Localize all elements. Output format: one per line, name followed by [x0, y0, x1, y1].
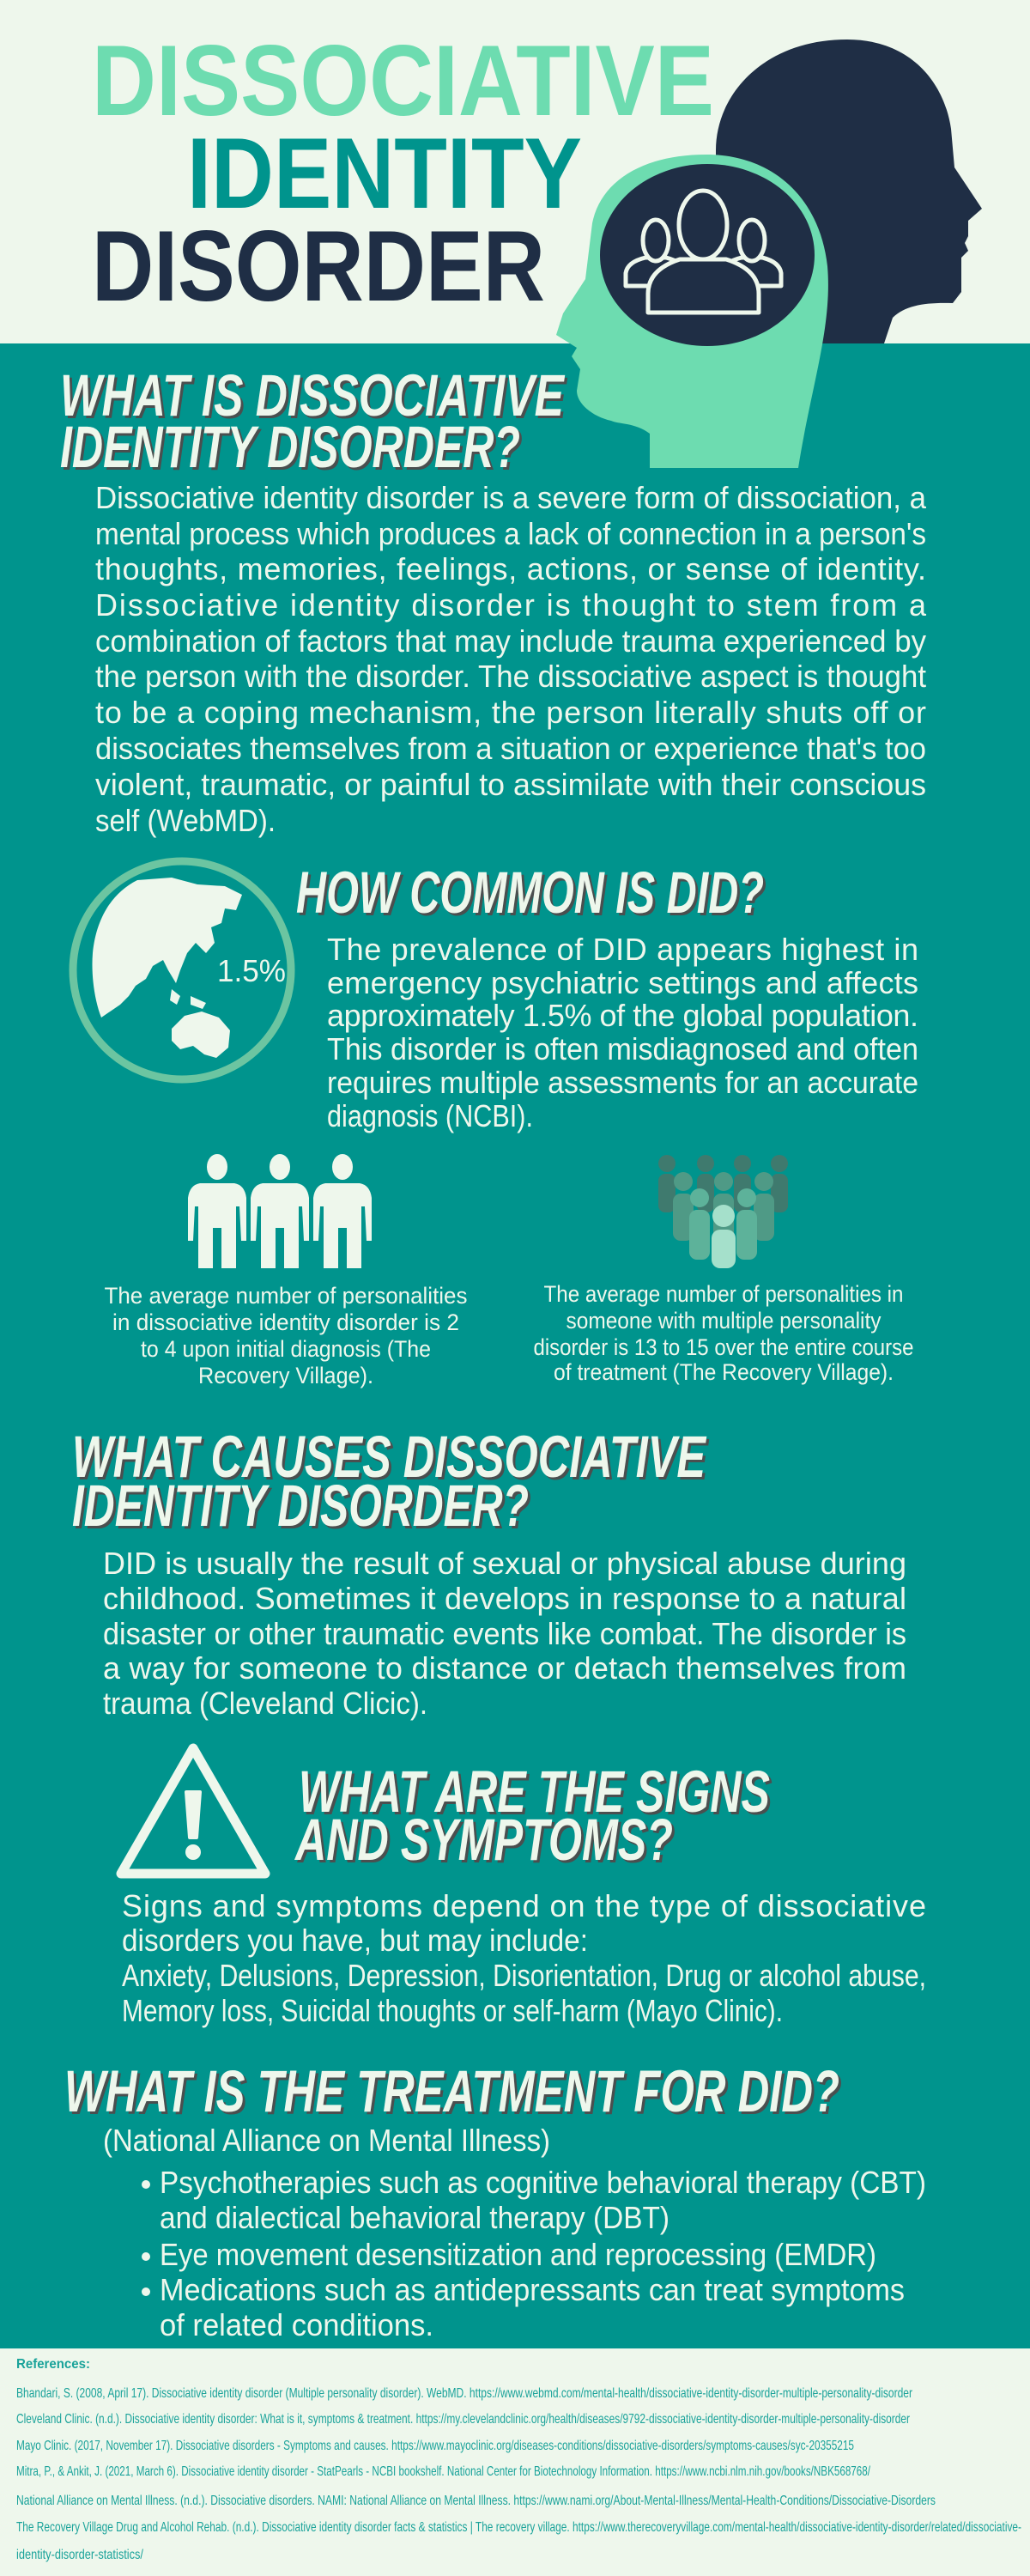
text block: definition: violent, traumatic, or painful to assimilate with their conscious	[95, 767, 926, 802]
text block: causes: trauma (Cleveland Clicic).	[103, 1686, 427, 1721]
caption: over treatment: of treatment (The Recovery Village).	[554, 1359, 894, 1385]
text block: causes: childhood. Sometimes it develops in response to a natural	[103, 1581, 906, 1616]
text block: prevalence: The prevalence of DID appears highest in	[327, 932, 918, 967]
icon: three people	[188, 1154, 372, 1268]
heading: causes: IDENTITY DISORDER?	[75, 1475, 531, 1541]
text block: definition: dissociates themselves from a situation or experience that's too	[95, 731, 926, 766]
heading: what is DID: WHAT IS DISSOCIATIVE	[63, 365, 567, 431]
heading: signs and symptoms: WHAT ARE THE SIGNS	[301, 1761, 772, 1827]
heading: signs and symptoms: WHAT ARE THE SIGNS	[299, 1759, 770, 1825]
text block: symptoms: Memory loss, Suicidal thoughts or self-harm (Mayo Clinic).	[122, 1993, 783, 2028]
caption: initial diagnosis: Recovery Village).	[198, 1363, 373, 1388]
heading: what is DID: WHAT IS DISSOCIATIVE	[60, 362, 565, 428]
caption: initial diagnosis	[105, 1283, 467, 1388]
heading: signs and symptoms	[294, 1759, 772, 1875]
caption: over treatment: disorder is 13 to 15 over the entire course	[534, 1334, 913, 1360]
heading: signs and symptoms: AND SYMPTOMS?	[294, 1807, 673, 1873]
caption: over treatment: someone with multiple personality	[566, 1308, 882, 1334]
title	[92, 24, 714, 322]
text block: causes: a way for someone to distance or detach themselves from	[103, 1650, 906, 1686]
icon: globe 1.5%	[73, 861, 291, 1079]
list: treatments: and dialectical behavioral therapy (DBT)	[160, 2200, 670, 2235]
heading: what is DID: IDENTITY DISORDER?	[63, 416, 523, 483]
references: References:	[16, 2357, 90, 2372]
text block: definition: the person with the disorder. The dissociative aspect is thought	[95, 659, 926, 694]
icon: warning triangle	[121, 1748, 265, 1874]
text block: definition: self (WebMD).	[95, 803, 276, 838]
text block: treatment source: (National Alliance on Mental Illness)	[103, 2123, 550, 2158]
text block: causes: disaster or other traumatic events like combat. The disorder is	[103, 1616, 906, 1651]
icon: navy head silhouette	[716, 39, 982, 343]
list: treatments: Medications such as antidepressants can treat symptoms	[160, 2272, 905, 2307]
text block: prevalence: emergency psychiatric settings and affects	[327, 965, 918, 1000]
references	[16, 2357, 1021, 2562]
heading: what is DID	[60, 362, 567, 483]
text block: definition: mental process which produces a lack of connection in a person's	[95, 516, 926, 551]
text block: definition: Dissociative identity disorder is a severe form of dissociation, a	[95, 480, 927, 515]
heading: what is DID: IDENTITY DISORDER?	[60, 414, 520, 480]
heading: how common	[296, 860, 766, 928]
heading: signs and symptoms: AND SYMPTOMS?	[297, 1809, 676, 1875]
list: treatments	[142, 2165, 926, 2342]
text block: prevalence	[327, 932, 918, 1133]
heading: how common: HOW COMMON IS DID?	[299, 862, 766, 928]
caption: over treatment	[534, 1281, 913, 1385]
caption: initial diagnosis: to 4 upon initial diagnosis (The	[141, 1336, 431, 1362]
text block: symptoms: Signs and symptoms depend on the type of dissociative	[122, 1888, 926, 1923]
text block: definition	[95, 480, 927, 838]
heading: causes	[72, 1424, 709, 1541]
list: treatments: of related conditions.	[160, 2307, 433, 2342]
text block: definition: combination of factors that may include trauma experienced by	[95, 623, 926, 659]
title: DISORDER	[92, 210, 545, 322]
heading: causes: WHAT CAUSES DISSOCIATIVE	[75, 1426, 709, 1492]
text block: prevalence: This disorder is often misdiagnosed and often	[327, 1031, 918, 1066]
caption: initial diagnosis: in dissociative identity disorder is 2	[112, 1309, 459, 1335]
heading: causes: IDENTITY DISORDER?	[72, 1473, 529, 1539]
text block: definition: to be a coping mechanism, the person literally shuts off or	[95, 695, 926, 730]
text block: definition: Dissociative identity disorder is thought to stem from a	[95, 587, 927, 623]
heading: how common: HOW COMMON IS DID?	[296, 860, 764, 926]
list: treatments: Psychotherapies such as cognitive behavioral therapy (CBT)	[160, 2165, 926, 2200]
text block: definition: thoughts, memories, feelings, actions, or sense of identity.	[95, 551, 926, 586]
caption: over treatment: The average number of personalities in	[544, 1281, 903, 1307]
text block: causes: DID is usually the result of sexual or physical abuse during	[103, 1546, 906, 1581]
heading: causes: WHAT CAUSES DISSOCIATIVE	[72, 1424, 706, 1490]
icon: mint head with people inside	[556, 155, 828, 468]
list: treatments: Eye movement desensitization and reprocessing (EMDR)	[160, 2237, 876, 2272]
text block: prevalence: requires multiple assessments for an accurate	[327, 1065, 918, 1100]
text block: prevalence: diagnosis (NCBI).	[327, 1098, 533, 1133]
caption: initial diagnosis: The average number of personalities	[105, 1283, 467, 1309]
icon: crowd of people	[658, 1155, 788, 1268]
text block: causes	[103, 1546, 906, 1721]
title: DISSOCIATIVE	[92, 24, 714, 137]
icon: globe 1.5%: 1.5%	[217, 953, 286, 988]
text block: symptoms	[122, 1888, 926, 2028]
references: identity-disorder-statistics/	[16, 2548, 143, 2562]
title: IDENTITY	[187, 117, 582, 229]
text block: symptoms: disorders you have, but may include:	[122, 1923, 588, 1958]
text block: prevalence: approximately 1.5% of the global population.	[327, 998, 918, 1033]
